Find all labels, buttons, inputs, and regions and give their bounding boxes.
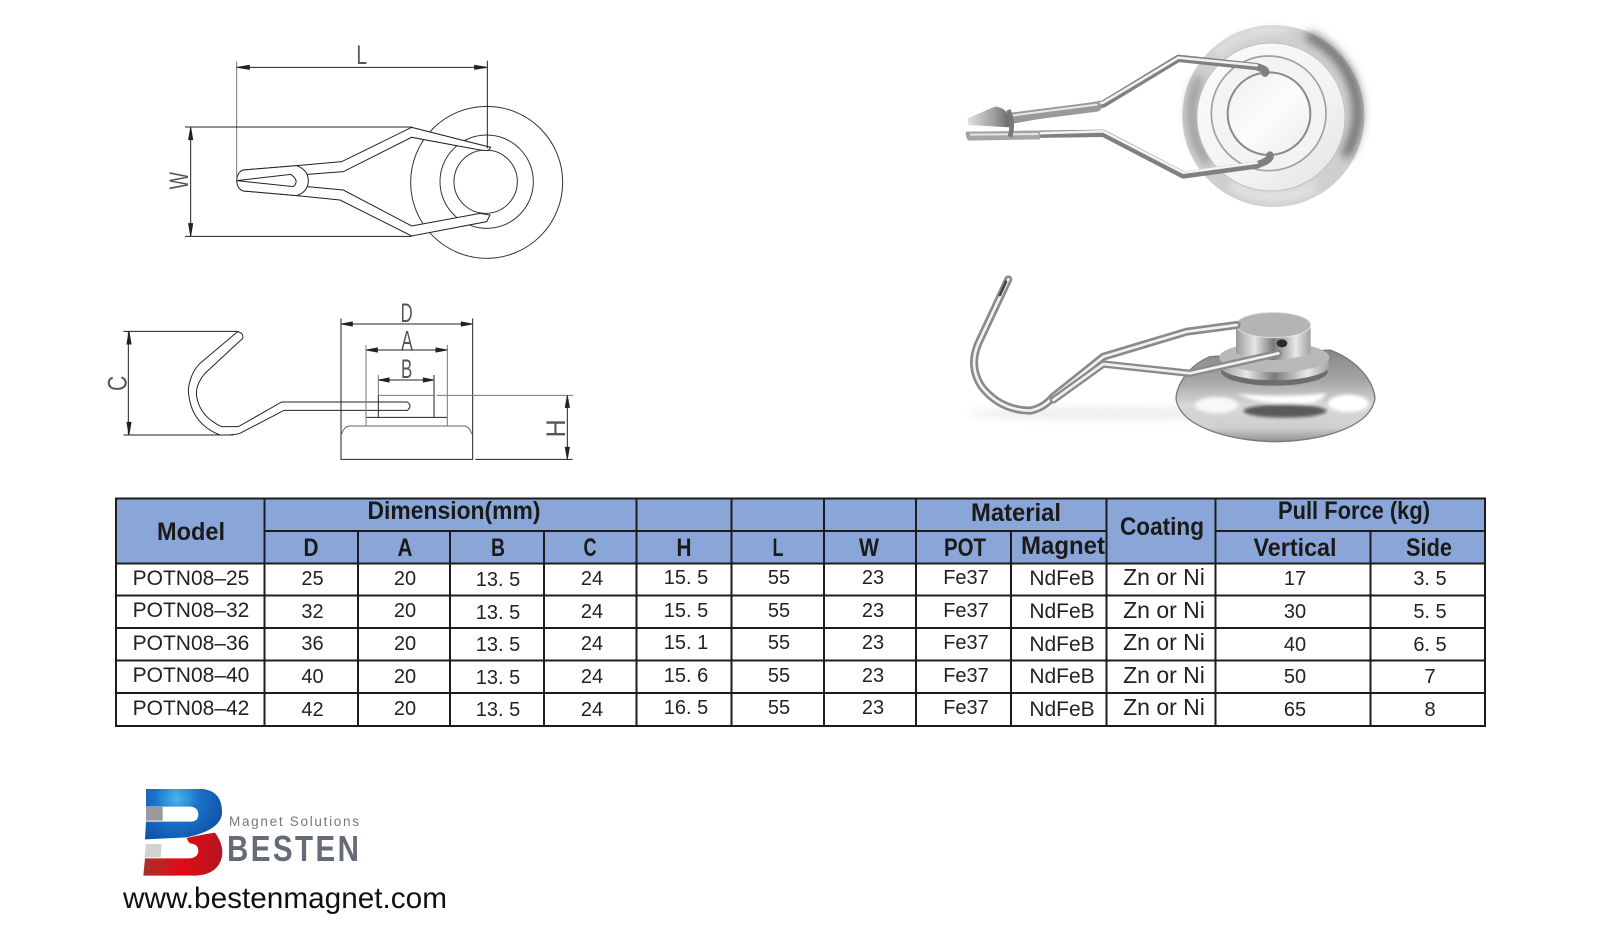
row POTN08-42: 23 xyxy=(862,697,884,719)
row POTN08-42: NdFeB xyxy=(1029,698,1095,721)
table header background xyxy=(116,498,1485,564)
disc rim xyxy=(1182,25,1364,207)
row POTN08-36: NdFeB xyxy=(1029,633,1095,656)
row POTN08-42: 42 xyxy=(301,699,324,721)
row POTN08-25: 25 xyxy=(301,568,324,590)
W dimension line xyxy=(164,127,412,236)
coating header: Coating xyxy=(1120,513,1204,541)
hook wire outline xyxy=(237,127,491,236)
row POTN08-25: Zn or Ni xyxy=(1123,564,1205,590)
rim shading xyxy=(1192,29,1358,197)
C dimension line: C xyxy=(103,376,133,391)
row POTN08-32: 55 xyxy=(768,600,790,622)
row POTN08-32: 13. 5 xyxy=(476,602,520,624)
row POTN08-42: POTN08–42 xyxy=(133,697,249,720)
row POTN08-36: 20 xyxy=(394,633,416,655)
top cylinder xyxy=(1236,312,1311,360)
row POTN08-36: 24 xyxy=(581,633,603,655)
row POTN08-36: 23 xyxy=(862,632,884,654)
row POTN08-32: 15. 5 xyxy=(664,600,708,622)
hook wire xyxy=(974,279,1278,411)
row POTN08-25: 17 xyxy=(1284,568,1306,590)
row POTN08-25: NdFeB xyxy=(1029,567,1095,590)
raised ring xyxy=(1211,56,1326,171)
column sub-headers: A xyxy=(398,534,412,562)
H dimension line xyxy=(378,395,573,459)
row POTN08-40: 7 xyxy=(1424,666,1436,688)
row POTN08-36 xyxy=(133,629,1447,656)
hook side profile xyxy=(188,332,410,435)
L dimension line xyxy=(237,40,487,180)
row POTN08-32: 32 xyxy=(301,601,324,623)
row POTN08-32: 20 xyxy=(394,600,416,622)
row POTN08-25: 20 xyxy=(394,568,416,590)
row POTN08-36: 6. 5 xyxy=(1413,634,1447,656)
H dimension line: H xyxy=(541,419,571,437)
row POTN08-32: 30 xyxy=(1284,601,1306,623)
row POTN08-32: 5. 5 xyxy=(1413,601,1447,623)
row POTN08-36: 13. 5 xyxy=(476,634,520,656)
D dimension line xyxy=(341,298,473,328)
row POTN08-36: Zn or Ni xyxy=(1123,629,1205,655)
column sub-headers: L xyxy=(772,534,784,562)
hook tip xyxy=(966,107,1040,141)
row POTN08-42: Fe37 xyxy=(943,697,989,719)
row POTN08-40: 24 xyxy=(581,666,603,688)
row POTN08-32: 24 xyxy=(581,601,603,623)
row POTN08-40: 13. 5 xyxy=(476,667,520,689)
row POTN08-40: NdFeB xyxy=(1029,665,1095,688)
row POTN08-36: 40 xyxy=(1284,634,1306,656)
technical drawing: top view of hook with L and W dimensions xyxy=(164,40,563,258)
row POTN08-36: Fe37 xyxy=(943,632,989,654)
row POTN08-40: 55 xyxy=(768,665,790,687)
centre cap xyxy=(1228,72,1310,155)
column sub-headers xyxy=(304,532,1452,562)
row POTN08-25: 15. 5 xyxy=(664,567,708,589)
column sub-headers: D xyxy=(304,534,318,562)
A dimension line xyxy=(366,325,447,355)
lower wire xyxy=(1012,131,1270,175)
row POTN08-32: Zn or Ni xyxy=(1123,597,1205,623)
photo: swivel hook magnet from the side xyxy=(967,279,1375,442)
photo: swivel hook magnet from above xyxy=(966,25,1364,207)
collar xyxy=(1219,342,1329,386)
row POTN08-42: 8 xyxy=(1424,699,1436,721)
row POTN08-25: 23 xyxy=(862,567,884,589)
row POTN08-32 xyxy=(133,597,1447,624)
row POTN08-40: 20 xyxy=(394,666,416,688)
wordmark: BESTEN xyxy=(227,828,361,869)
row POTN08-32: Fe37 xyxy=(943,600,989,622)
row POTN08-42: 20 xyxy=(394,698,416,720)
row POTN08-42: 13. 5 xyxy=(476,699,520,721)
specification table xyxy=(116,497,1485,726)
W dimension line: W xyxy=(164,171,194,189)
row POTN08-25: 55 xyxy=(768,567,790,589)
row POTN08-36: 55 xyxy=(768,632,790,654)
row POTN08-32: 23 xyxy=(862,600,884,622)
icon: blue and red B xyxy=(143,789,222,876)
row POTN08-36: 36 xyxy=(301,633,324,655)
website address: www.bestenmagnet.com xyxy=(122,882,447,915)
row POTN08-25: 24 xyxy=(581,568,603,590)
row POTN08-25 xyxy=(133,564,1447,591)
C dimension line xyxy=(103,331,238,435)
table grid xyxy=(116,498,1485,726)
B dimension line: B xyxy=(401,354,412,384)
cast shadow xyxy=(967,406,1247,421)
row POTN08-40: Zn or Ni xyxy=(1123,662,1205,688)
tagline: Magnet Solutions xyxy=(229,814,359,829)
row POTN08-40: 40 xyxy=(301,666,324,688)
B dimension line xyxy=(378,354,434,384)
domed magnet base xyxy=(1176,350,1375,442)
dimension group header: Dimension(mm) xyxy=(368,497,540,525)
row POTN08-40 xyxy=(133,662,1436,689)
row POTN08-25: 13. 5 xyxy=(476,569,520,591)
row POTN08-36: 15. 1 xyxy=(664,632,708,654)
magnet base profile xyxy=(341,318,473,459)
column sub-headers: POT xyxy=(944,534,986,562)
material group header: Material xyxy=(971,499,1061,527)
row POTN08-25: Fe37 xyxy=(943,567,989,589)
column sub-headers: B xyxy=(491,534,505,562)
D dimension line: D xyxy=(401,298,413,328)
column sub-headers: C xyxy=(584,534,596,562)
model header: Model xyxy=(157,518,225,546)
row POTN08-40: 50 xyxy=(1284,666,1306,688)
row POTN08-25: POTN08–25 xyxy=(133,567,249,590)
column sub-headers: Magnet xyxy=(1021,532,1106,560)
row POTN08-32: POTN08–32 xyxy=(133,599,249,622)
row POTN08-40: 15. 6 xyxy=(664,665,708,687)
row POTN08-42: 65 xyxy=(1284,699,1306,721)
row POTN08-40: POTN08–40 xyxy=(133,664,249,687)
L dimension line: L xyxy=(356,40,367,70)
pull force group header: Pull Force (kg) xyxy=(1278,497,1430,525)
row POTN08-40: 23 xyxy=(862,665,884,687)
row POTN08-25: 3. 5 xyxy=(1413,568,1447,590)
technical drawing: side view with C, D, A, B and H dimensions xyxy=(103,298,573,459)
row POTN08-42: 16. 5 xyxy=(664,697,708,719)
column sub-headers: Side xyxy=(1406,534,1452,562)
row POTN08-32: NdFeB xyxy=(1029,600,1095,623)
row POTN08-42: Zn or Ni xyxy=(1123,694,1205,720)
row POTN08-42 xyxy=(133,694,1436,721)
column sub-headers: Vertical xyxy=(1254,534,1336,562)
magnet base circles xyxy=(411,106,563,258)
row POTN08-36: POTN08–36 xyxy=(133,632,249,655)
row POTN08-40: Fe37 xyxy=(943,665,989,687)
upper wire xyxy=(1012,58,1266,120)
base reflections xyxy=(1195,393,1368,418)
disc face xyxy=(1197,43,1345,191)
row POTN08-42: 24 xyxy=(581,699,603,721)
column sub-headers: W xyxy=(859,534,879,562)
row POTN08-42: 55 xyxy=(768,697,790,719)
A dimension line: A xyxy=(401,325,413,355)
column sub-headers: H xyxy=(676,534,692,562)
logo: Besten Magnet Solutions xyxy=(143,789,361,876)
